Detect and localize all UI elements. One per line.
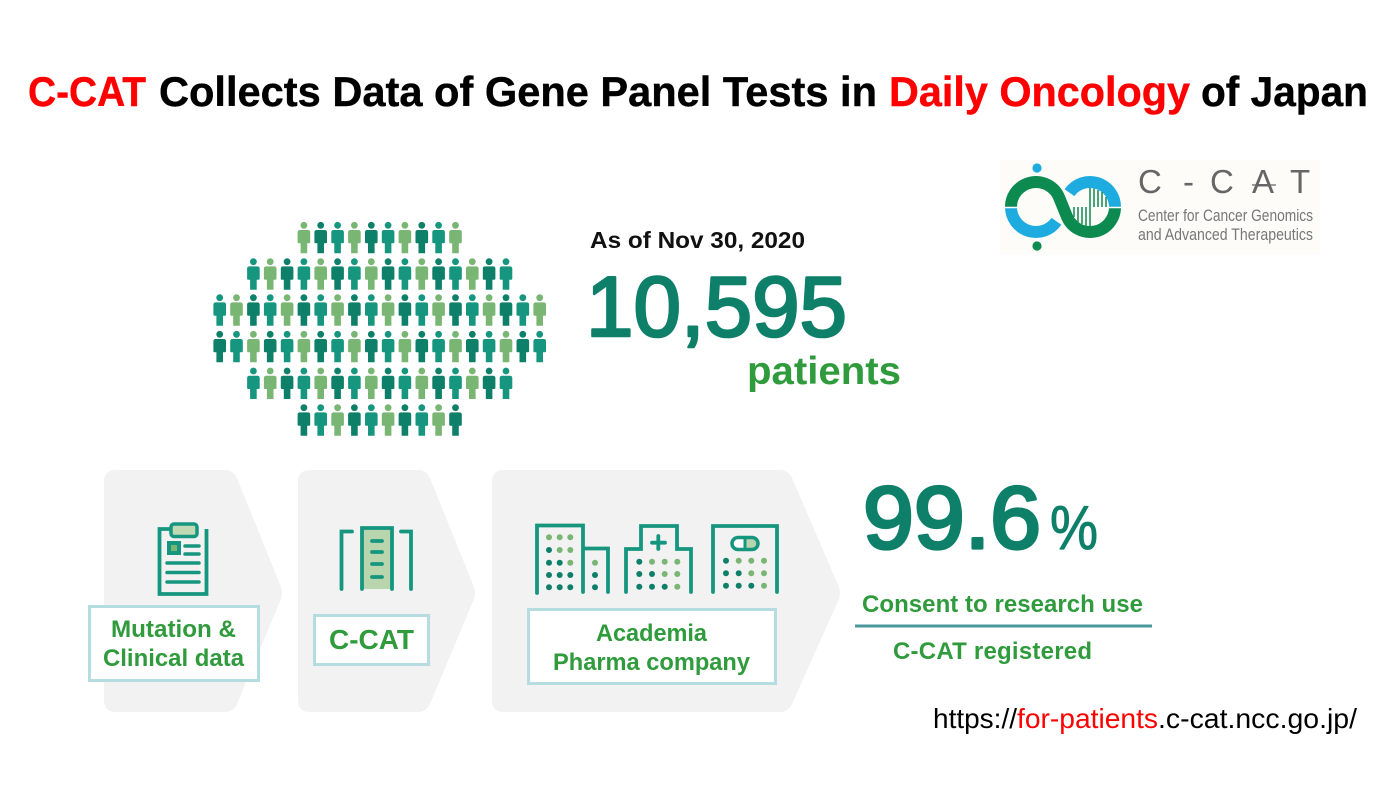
arrow panel: academia and pharma xyxy=(492,470,840,712)
date label: As of Nov 30, 2020 xyxy=(590,227,805,253)
title xyxy=(28,68,1368,115)
pictogram: patients xyxy=(213,222,546,436)
icon: clipboard xyxy=(160,524,206,594)
text box: C-CAT xyxy=(314,616,428,664)
icon: office buildings xyxy=(537,526,608,593)
logo wordmark: C-CAT xyxy=(1138,163,1310,200)
consent percentage: 99.6 xyxy=(863,468,1041,567)
logo wordmark: and Advanced Therapeutics xyxy=(1138,226,1313,244)
website url xyxy=(933,703,1357,734)
fraction: consent over registered: C-CAT registered xyxy=(893,638,1092,665)
logo: C-CAT xyxy=(1000,160,1320,254)
icon: hospital xyxy=(626,526,691,592)
text box: academia and pharma company xyxy=(528,610,776,684)
title: C-CAT xyxy=(28,68,146,115)
title: Collects Data of Gene Panel Tests in xyxy=(159,68,877,115)
text box: mutation and clinical data: Clinical data xyxy=(103,645,245,672)
text box: mutation and clinical data xyxy=(90,606,258,680)
website url: for-patients xyxy=(1017,703,1158,734)
icon: infinity mark xyxy=(1004,163,1122,251)
arrow panel: C-CAT xyxy=(298,470,475,712)
logo wordmark xyxy=(1138,163,1313,244)
website url: https:// xyxy=(933,703,1017,734)
title: of Japan xyxy=(1201,68,1368,115)
text box: mutation and clinical data: Mutation & xyxy=(111,616,236,643)
fraction: consent over registered: Consent to research use xyxy=(862,591,1143,618)
text box: academia and pharma company: Academia xyxy=(596,620,708,647)
title: Daily Oncology xyxy=(889,68,1191,115)
website url: .c-cat.ncc.go.jp/ xyxy=(1158,703,1357,734)
patients label: patients xyxy=(747,350,901,393)
text box: academia and pharma company: Pharma company xyxy=(553,649,751,676)
icon: pharmacy building xyxy=(713,526,777,592)
text box: C-CAT: C-CAT xyxy=(329,624,414,655)
patient count: 10,595 xyxy=(586,260,847,355)
fraction: consent over registered xyxy=(855,591,1152,665)
logo wordmark: Center for Cancer Genomics xyxy=(1138,207,1313,225)
icon: server tower xyxy=(342,528,411,589)
arrow panel: mutation and clinical data xyxy=(90,470,282,712)
consent percentage: % xyxy=(1050,494,1098,563)
